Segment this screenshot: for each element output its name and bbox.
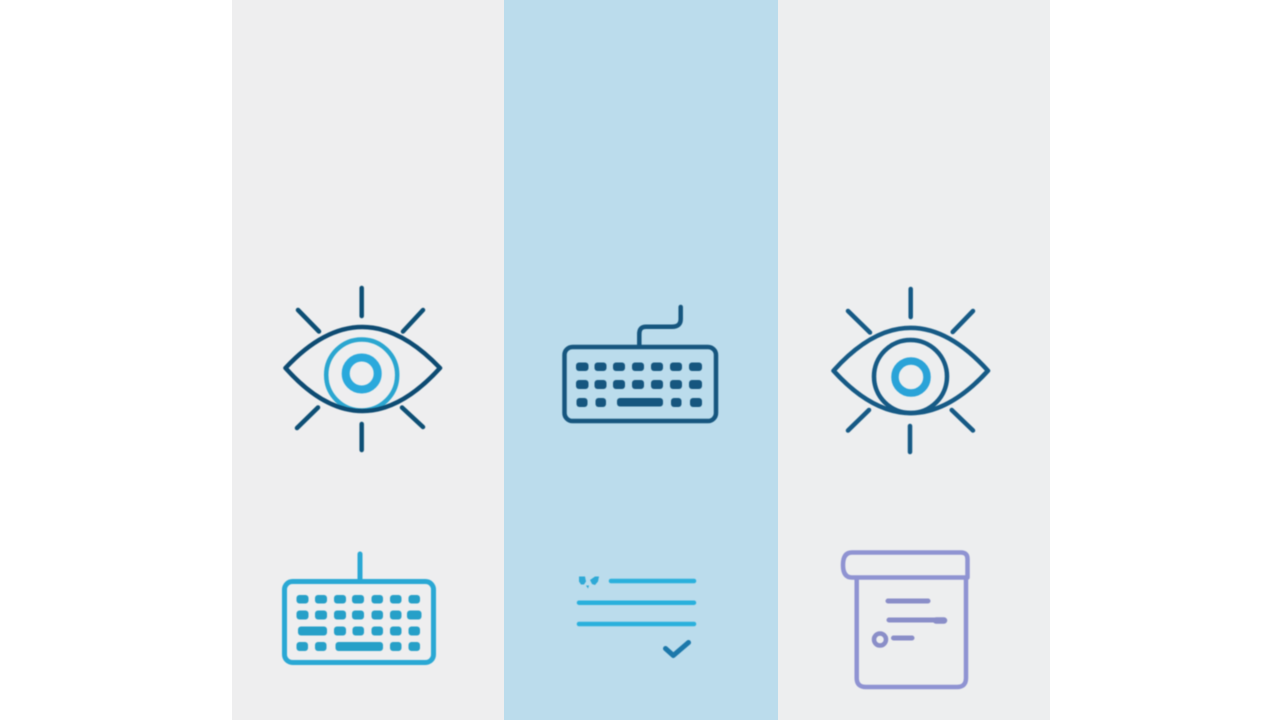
keyboard keys <box>296 595 422 651</box>
checkmark <box>666 642 688 656</box>
bullet circle <box>874 634 886 646</box>
eye outline <box>286 327 440 411</box>
icon: center keyboard <box>564 307 716 421</box>
quotation marks <box>579 576 599 588</box>
eye pupil ring <box>346 358 378 390</box>
keyboard keys <box>576 362 702 407</box>
icon: document scroll <box>843 552 968 687</box>
document body <box>857 578 966 687</box>
panel: center column <box>504 0 778 720</box>
icon: left eye <box>286 288 440 450</box>
panel: left column <box>232 0 504 720</box>
keyboard cable <box>358 554 362 580</box>
scroll header <box>843 552 968 578</box>
eye iris ring <box>874 340 947 413</box>
icon: right eye <box>834 289 988 452</box>
text lines <box>579 581 694 624</box>
eye pupil ring <box>895 361 927 393</box>
eye outline <box>834 328 988 413</box>
keyboard cable <box>639 307 681 346</box>
keyboard body <box>564 347 716 421</box>
eye iris ring <box>326 340 397 410</box>
document text lines <box>888 601 940 638</box>
icon: bottom left keyboard <box>284 554 434 662</box>
icon: text lines with checkmark <box>579 576 694 656</box>
keyboard body <box>284 582 434 662</box>
eye rays <box>848 289 973 452</box>
line end mark <box>936 617 944 624</box>
eye rays <box>297 288 423 450</box>
panel: right column <box>778 0 1050 720</box>
